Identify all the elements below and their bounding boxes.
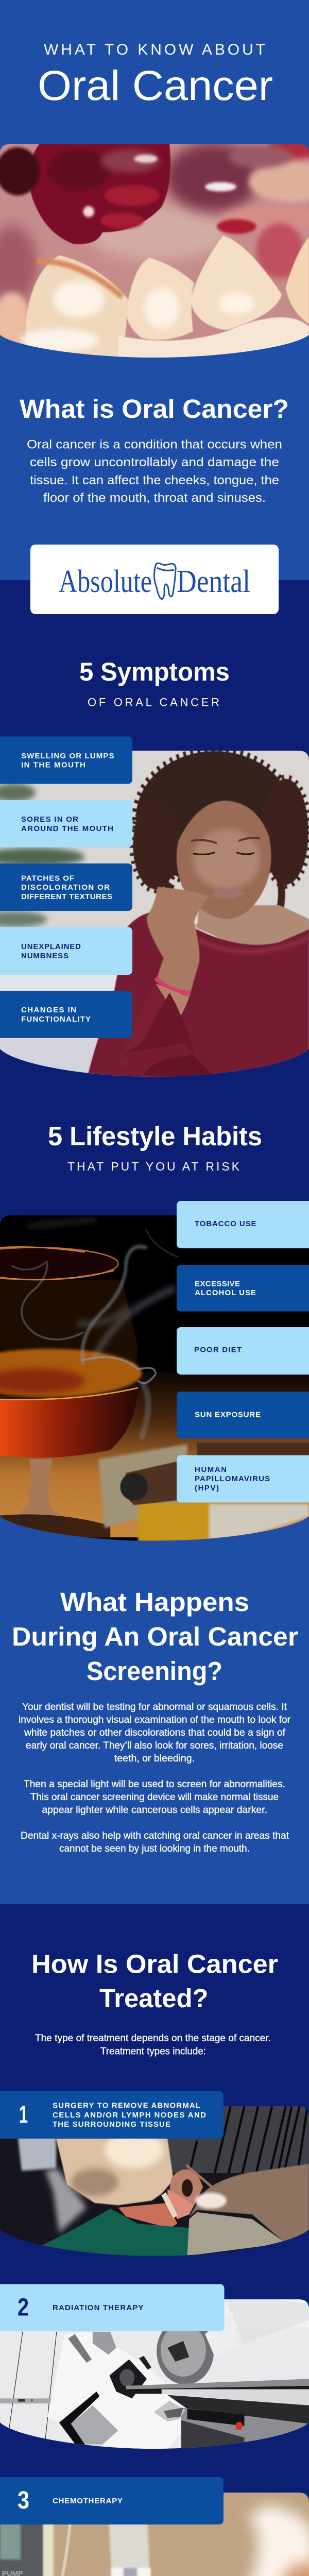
background: navy symptoms and habits section — [0, 580, 309, 1353]
photo: chemotherapy drip — [0, 2493, 309, 2576]
list: symptoms — [0, 737, 132, 1038]
text block: screening description — [19, 1702, 291, 1854]
panel: treatment 3: CHEMOTHERAPY — [53, 2497, 123, 2505]
panel: logo: Absolute — [59, 564, 152, 599]
text block: screening description: cannot be seen by just looking in the mouth. — [59, 1843, 250, 1854]
photo: brandy glass and cigar — [0, 1213, 309, 1547]
text block: screening description: white patches or other discolorations that could be a sign of — [24, 1727, 286, 1738]
panel: treatment 1: 1 — [19, 2101, 28, 2129]
panel: treatment 3: 3 — [18, 2487, 29, 2514]
heading: 5 lifestyle habits: 5 Lifestyle Habits — [48, 1122, 262, 1151]
panel: treatment 2 — [0, 2284, 225, 2331]
symptom 2 — [0, 800, 132, 847]
habit 2: EXCESSIVE — [195, 1280, 240, 1288]
habit 4 — [177, 1392, 309, 1438]
symptom 5: FUNCTIONALITY — [21, 1015, 91, 1024]
title — [38, 41, 273, 109]
habit 3: POOR DIET — [194, 1346, 242, 1354]
habit 5: (HPV) — [195, 1484, 219, 1493]
heading: 5 symptoms: 5 Symptoms — [79, 657, 230, 686]
heading: what happens during screening: During An Oral Cancer — [12, 1622, 298, 1651]
text block: screening description: Then a special light will be used to screen for abnormalities. — [24, 1779, 285, 1790]
symptom 5: CHANGES IN — [21, 1006, 76, 1014]
habit 5: HUMAN — [195, 1465, 227, 1474]
photo: radiation machine — [0, 2297, 309, 2451]
habit 2 — [177, 1265, 309, 1312]
habit 1 — [177, 1201, 309, 1248]
symptom 1 — [0, 737, 132, 784]
symptom 4: UNEXPLAINED — [21, 942, 81, 951]
text block: definition: floor of the mouth, throat and sinuses. — [43, 491, 266, 505]
subheading: of oral cancer: OF ORAL CANCER — [88, 696, 219, 709]
heading: what happens during screening: What Happens — [60, 1587, 249, 1617]
text block: definition: tissue. It can affect the cheeks, tongue, the — [30, 473, 279, 487]
habit 4: SUN EXPOSURE — [195, 1411, 261, 1419]
icon: tooth — [154, 563, 176, 599]
text block: definition: cells grow uncontrollably and damage the — [30, 455, 279, 469]
background: light blue top section — [0, 0, 309, 580]
panel: logo — [30, 545, 279, 614]
list: lifestyle habits — [177, 1201, 309, 1502]
subheading: that put you at risk: THAT PUT YOU AT RISK — [67, 1160, 240, 1173]
symptom 4: NUMBNESS — [21, 952, 68, 960]
text block: definition: Oral cancer is a condition that occurs when — [27, 438, 282, 451]
symptom 3: PATCHES OF — [21, 874, 74, 883]
text block: screening description: appear lighter while cancerous cells appear darker. — [42, 1805, 267, 1816]
habit 5: PAPILLOMAVIRUS — [195, 1475, 270, 1483]
panel: treatment 1: THE SURROUNDING TISSUE — [53, 2120, 170, 2129]
habit 3 — [177, 1327, 309, 1375]
text block: screening description: Your dentist will be testing for abnormal or squamous cells. It — [22, 1702, 287, 1713]
panel: treatment 3 — [0, 2477, 224, 2524]
heading: how is oral cancer treated — [31, 1950, 278, 2013]
background: light blue screening section — [0, 1353, 309, 1904]
background: navy treatment section — [0, 1904, 309, 2576]
symptom 5 — [0, 991, 132, 1038]
text block: treatment intro: The type of treatment depends on the stage of cancer. — [35, 2033, 271, 2044]
habit 2: ALCOHOL USE — [195, 1289, 256, 1297]
symptom 1: IN THE MOUTH — [21, 760, 85, 770]
text block: screening description: teeth, or bleeding. — [114, 1753, 195, 1764]
text block: treatment intro — [35, 2033, 271, 2057]
photo: oral lesion and teeth — [0, 135, 309, 363]
text block: screening description: early oral cancer. They’ll also look for sores, irritation, loose — [26, 1740, 283, 1751]
heading: what is oral cancer: What is Oral Cancer? — [20, 394, 289, 423]
panel: treatment 2: 2 — [18, 2294, 29, 2321]
symptom 3 — [0, 863, 132, 911]
text block: definition — [27, 438, 282, 505]
heading: what happens during screening: Screening? — [87, 1656, 222, 1686]
symptom 2: AROUND THE MOUTH — [21, 824, 113, 833]
text block: treatment intro: Treatment types include: — [100, 2046, 206, 2057]
symptom 3: DIFFERENT TEXTURES — [21, 892, 112, 901]
symptom 3: DISCOLORATION OR — [21, 883, 110, 892]
heading: what happens during screening — [12, 1587, 298, 1686]
panel: treatment 1: SURGERY TO REMOVE ABNORMAL — [53, 2101, 200, 2110]
text block: screening description: Dental x-rays also help with catching oral cancer in areas that — [21, 1831, 289, 1841]
title: WHAT TO KNOW ABOUT — [44, 41, 265, 58]
panel: logo: Dental — [177, 564, 250, 599]
text block: screening description: involves a thorough visual examination of the mouth to look for — [19, 1715, 291, 1725]
heading: how is oral cancer treated: Treated? — [99, 1984, 208, 2013]
symptom 2: SORES IN OR — [21, 815, 78, 824]
panel: treatment 1: CELLS AND/OR LYMPH NODES AND — [53, 2111, 206, 2120]
symptom 4 — [0, 927, 132, 975]
heading: how is oral cancer treated: How Is Oral Cancer — [31, 1950, 278, 1978]
photo: woman with mouth pain — [0, 749, 309, 1082]
panel: treatment 1 — [0, 2091, 224, 2139]
habit 1: TOBACCO USE — [195, 1219, 256, 1228]
photo: oral surgery — [0, 2104, 309, 2261]
text block: screening description: This oral cancer screening device will make normal tissue — [30, 1792, 279, 1803]
title: Oral Cancer — [38, 62, 273, 109]
habit 5 — [177, 1455, 309, 1502]
symptom 1: SWELLING OR LUMPS — [21, 752, 114, 760]
panel: treatment 2: RADIATION THERAPY — [53, 2303, 143, 2312]
